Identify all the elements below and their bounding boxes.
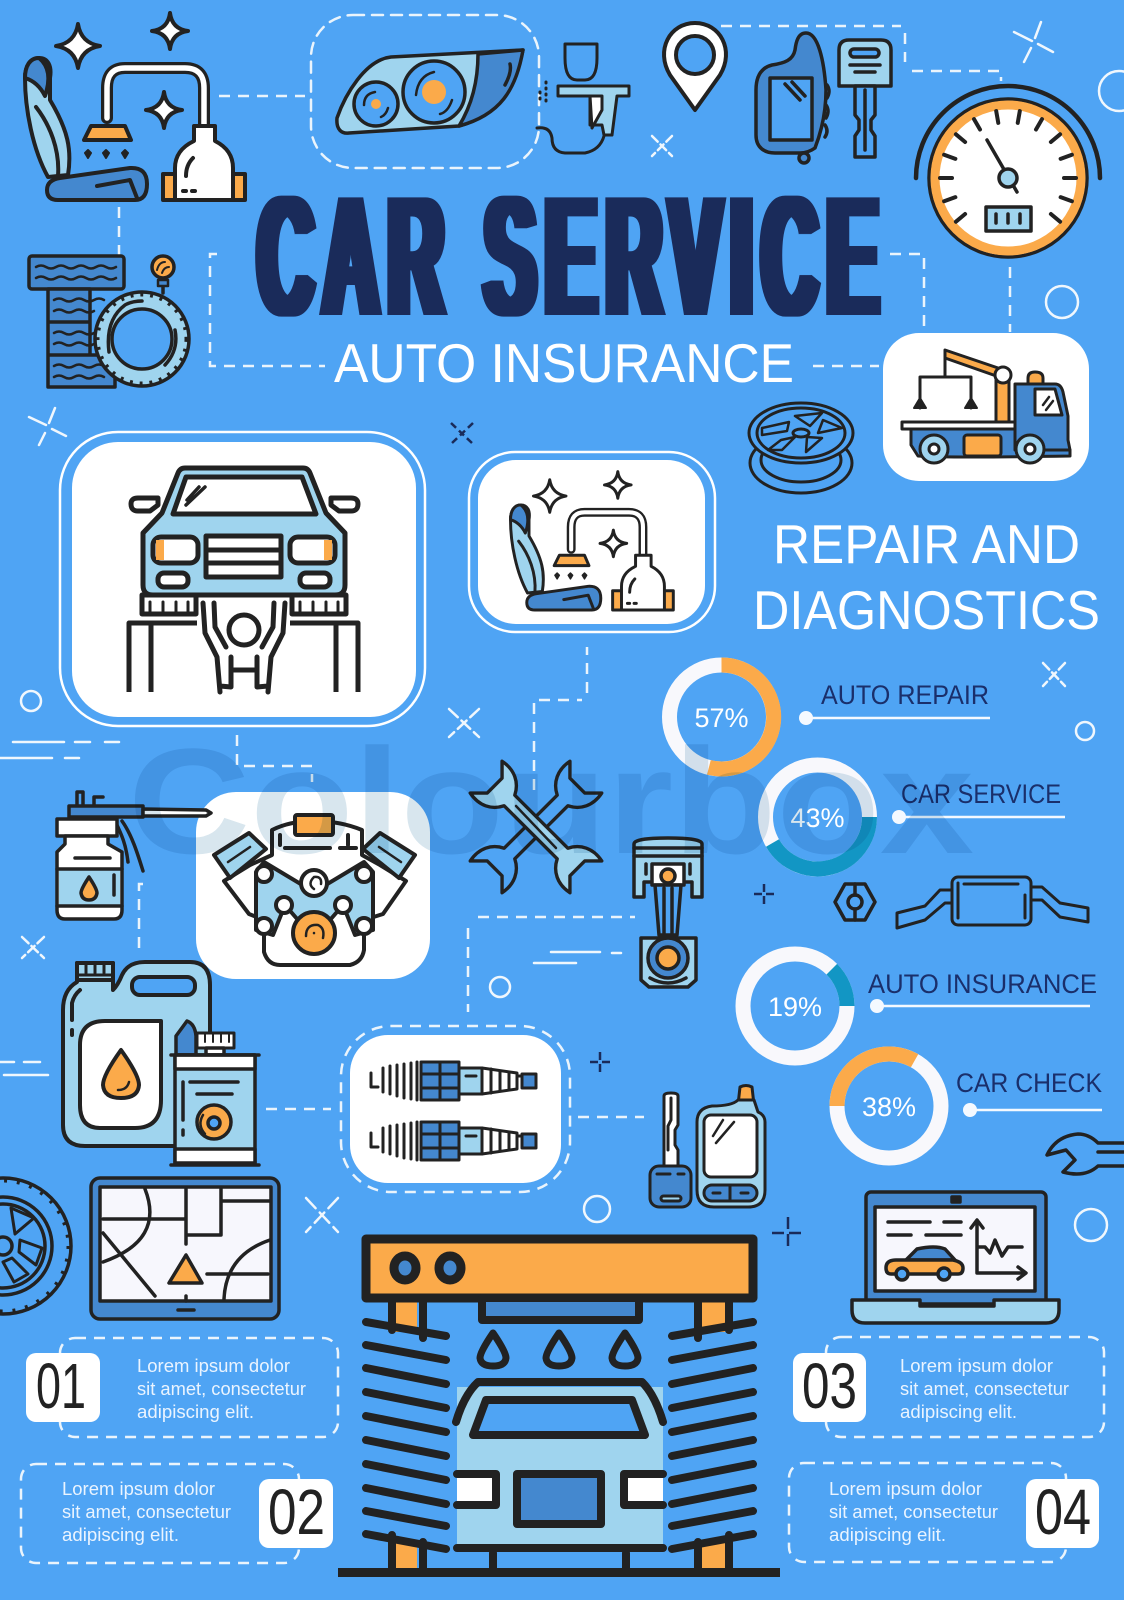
- label: car service: CAR SERVICE: [901, 779, 1061, 809]
- info block 04: 04: [1035, 1476, 1091, 1548]
- label: auto repair: [799, 680, 990, 725]
- label: car check: [956, 1068, 1102, 1117]
- icon: wrench right edge: [1047, 1134, 1124, 1174]
- icon panel: tow truck: [883, 333, 1089, 481]
- icon: seat cleaning: [25, 13, 245, 200]
- heading: repair and diagnostics: [753, 513, 1100, 641]
- icon: tires: [29, 256, 189, 387]
- donut: car service 43%: [766, 765, 870, 869]
- info block 03: [793, 1337, 1104, 1437]
- info block 01: [26, 1338, 338, 1437]
- icon: laptop diagnostics: [852, 1192, 1059, 1323]
- icon: muffler: [897, 877, 1088, 928]
- panel: interior cleaning: [469, 452, 715, 632]
- info block 04: sit amet, consectetur: [829, 1501, 998, 1522]
- icon: hex nut: [835, 884, 875, 920]
- donut: auto repair 57%: 57%: [694, 703, 749, 733]
- label: auto repair: AUTO REPAIR: [821, 680, 989, 710]
- subtitle: auto insurance: AUTO INSURANCE: [334, 332, 794, 394]
- heading: repair and diagnostics: REPAIR AND: [773, 513, 1080, 575]
- icon: car wash: [338, 1239, 780, 1577]
- decorative sparkle and circles top right: [652, 22, 1124, 318]
- label: auto insurance: AUTO INSURANCE: [868, 969, 1097, 999]
- donut: car check 38%: 38%: [862, 1092, 916, 1122]
- info block 03: sit amet, consectetur: [900, 1378, 1069, 1399]
- icon: car alarm remote and key: [756, 33, 891, 163]
- icon: headlight: [311, 15, 539, 168]
- info block 03: adipiscing elit.: [900, 1401, 1017, 1422]
- icon: crossed wrenches: [470, 761, 602, 893]
- icon: map pin: [664, 23, 726, 110]
- icon: oil tin: [171, 1021, 259, 1165]
- label: car check: CAR CHECK: [956, 1068, 1102, 1098]
- info block 02: 02: [268, 1476, 325, 1548]
- donut: auto insurance 19%: [743, 954, 847, 1058]
- icon: spark plugs: [371, 1062, 536, 1160]
- info block 04: [789, 1463, 1099, 1562]
- info block 03: 03: [802, 1350, 857, 1422]
- label: auto insurance: [868, 969, 1097, 1013]
- panel: car lift repair: [60, 432, 425, 726]
- watermark: Colourbox: [128, 717, 974, 885]
- donut: auto repair 57%: [670, 665, 774, 769]
- info block 02: adipiscing elit.: [62, 1524, 179, 1545]
- icon: spray gun: [537, 44, 629, 153]
- icon: speedometer: [916, 86, 1100, 257]
- info block 04: Lorem ipsum dolor: [829, 1478, 982, 1499]
- info block 01: 01: [36, 1350, 86, 1422]
- icon: gps navigator: [91, 1178, 279, 1319]
- icon: wheel: [0, 1178, 71, 1314]
- donut: car service 43%: 43%: [790, 803, 845, 833]
- info block 02: Lorem ipsum dolor: [62, 1478, 215, 1499]
- panel: engine: [196, 792, 430, 979]
- info block 02: [21, 1464, 333, 1563]
- icon: car on lift: [129, 468, 358, 692]
- icon: alloy rim: [749, 403, 853, 493]
- icon: key and key fob: [650, 1086, 765, 1207]
- heading: repair and diagnostics: DIAGNOSTICS: [753, 579, 1100, 641]
- label: car service: [892, 779, 1065, 824]
- donut: auto insurance 19%: 19%: [768, 992, 822, 1022]
- info block 01: adipiscing elit.: [137, 1401, 254, 1422]
- info block 02: sit amet, consectetur: [62, 1501, 231, 1522]
- connector lines: [0, 26, 1010, 1117]
- info block 03: Lorem ipsum dolor: [900, 1355, 1053, 1376]
- donut: car check 38%: [837, 1054, 941, 1158]
- info block 04: adipiscing elit.: [829, 1524, 946, 1545]
- decorative marks mid: [21, 408, 1107, 1250]
- icon: piston: [634, 838, 702, 987]
- icon: oil canister: [63, 962, 210, 1146]
- panel: spark plugs: [341, 1026, 570, 1192]
- info block 01: sit amet, consectetur: [137, 1378, 306, 1399]
- icon: engine: [214, 815, 415, 965]
- info block 01: Lorem ipsum dolor: [137, 1355, 290, 1376]
- icon: oil can: [57, 792, 211, 919]
